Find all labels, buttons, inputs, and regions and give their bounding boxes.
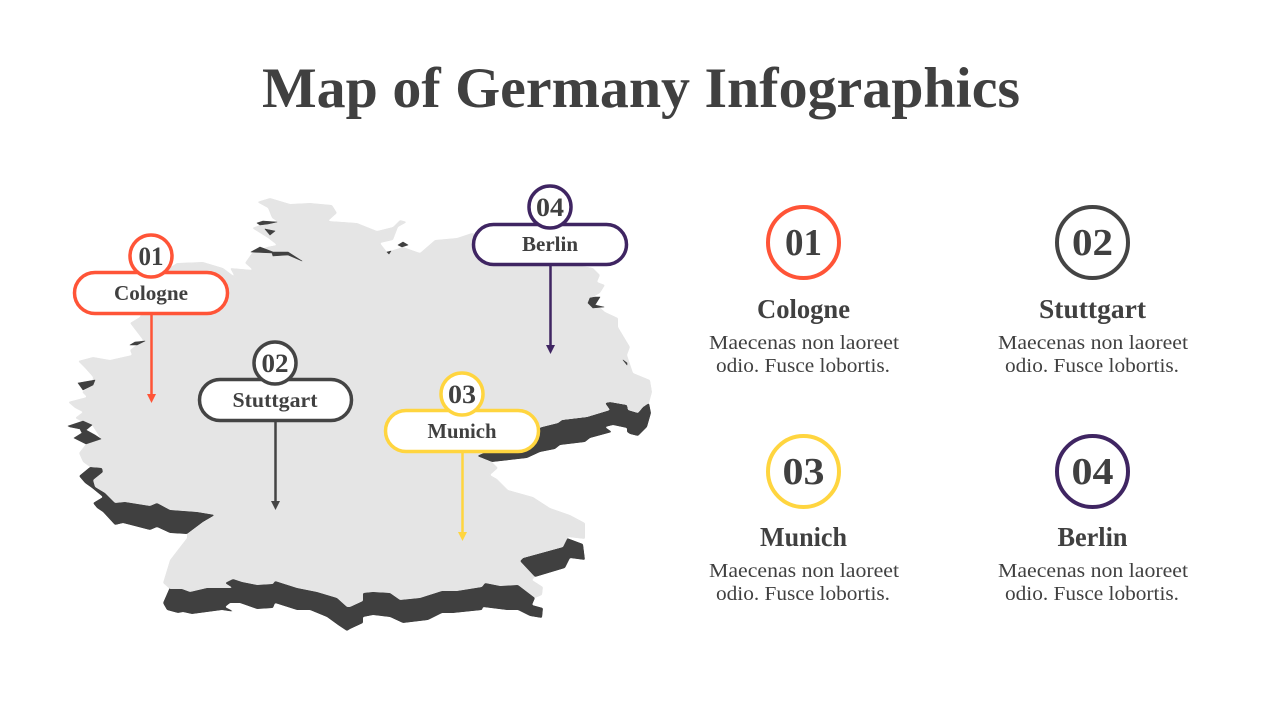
number badge xyxy=(254,342,296,384)
description: odio. Fusce lobortis. xyxy=(716,355,890,377)
pin: Stuttgart xyxy=(200,342,352,510)
number badge xyxy=(130,235,172,277)
description: odio. Fusce lobortis. xyxy=(716,583,890,605)
title: Map of Germany Infographics xyxy=(262,57,1020,120)
description xyxy=(709,332,899,377)
map shadow spots xyxy=(68,221,627,444)
description xyxy=(998,560,1188,605)
heading: Berlin xyxy=(1058,522,1128,552)
number: 01 xyxy=(138,242,164,271)
number: 01 xyxy=(785,222,822,264)
label pill xyxy=(386,410,538,452)
label pill xyxy=(200,380,352,420)
label pill xyxy=(74,272,228,314)
card: Munich xyxy=(709,436,899,605)
description: odio. Fusce lobortis. xyxy=(1005,583,1179,605)
heading: Cologne xyxy=(757,294,850,324)
description xyxy=(998,332,1188,377)
description xyxy=(709,560,899,605)
pointer arrow xyxy=(271,421,280,510)
number: 04 xyxy=(536,193,564,222)
number: 03 xyxy=(782,451,824,493)
pin: Berlin xyxy=(474,186,626,354)
pointer arrow xyxy=(458,452,467,541)
map of Germany xyxy=(68,198,652,631)
number: 02 xyxy=(1072,222,1113,264)
description: Maecenas non laoreet xyxy=(709,560,899,582)
pointer arrow xyxy=(147,314,156,403)
pin: Munich xyxy=(386,373,538,541)
map land xyxy=(68,198,652,607)
number: 02 xyxy=(262,349,288,378)
city name: Berlin xyxy=(522,232,578,256)
number circle xyxy=(768,436,839,507)
pin: Cologne xyxy=(74,235,228,403)
heading: Stuttgart xyxy=(1039,294,1146,324)
city name: Cologne xyxy=(114,281,188,305)
number badge xyxy=(441,373,483,415)
card: Stuttgart xyxy=(998,207,1188,377)
map shadow bands xyxy=(79,402,651,631)
city name: Munich xyxy=(428,419,497,443)
number circle xyxy=(1057,436,1128,507)
pointer arrow xyxy=(546,265,555,354)
description: Maecenas non laoreet xyxy=(998,560,1188,582)
card: Berlin xyxy=(998,436,1188,605)
label pill xyxy=(474,224,626,264)
card: Cologne xyxy=(709,207,899,377)
description: Maecenas non laoreet xyxy=(709,332,899,354)
number circle xyxy=(768,207,839,278)
heading: Munich xyxy=(760,522,847,552)
description: odio. Fusce lobortis. xyxy=(1005,355,1179,377)
number: 04 xyxy=(1072,451,1114,493)
number badge xyxy=(529,186,571,228)
number: 03 xyxy=(448,380,476,409)
city name: Stuttgart xyxy=(232,388,318,412)
description: Maecenas non laoreet xyxy=(998,332,1188,354)
number circle xyxy=(1057,207,1128,278)
